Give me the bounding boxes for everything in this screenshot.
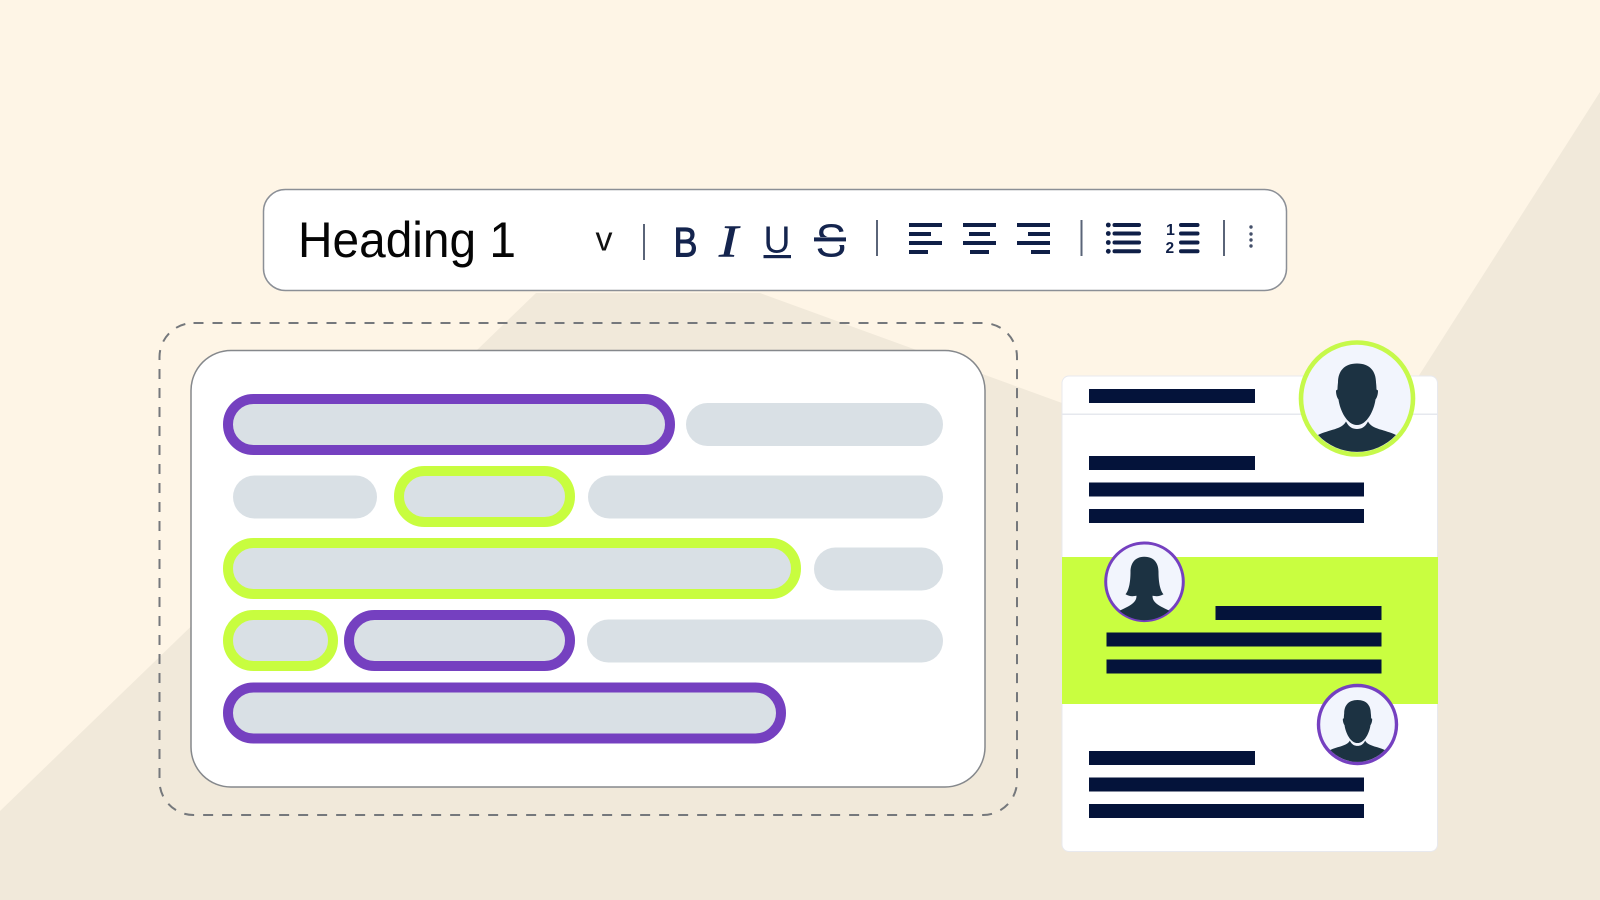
- icon: underline: U: [764, 219, 790, 261]
- header divider: [1062, 414, 1438, 415]
- dashed selection frame: [160, 323, 1017, 815]
- row 1 pills: [228, 399, 943, 450]
- panel: comments card: [1062, 376, 1438, 852]
- icon: strikethrough: S: [816, 214, 846, 266]
- row 3 pills: [228, 543, 943, 594]
- toolbar separators: [643, 220, 1225, 260]
- comment 1 text lines: [1089, 456, 1364, 523]
- icon: italic: I: [718, 216, 741, 266]
- icon: numbered list: 1: [1166, 222, 1175, 239]
- panel: formatting toolbar: [264, 190, 1286, 290]
- icon: more options: [1249, 225, 1253, 248]
- icon: large male avatar: [1301, 342, 1413, 454]
- dropdown caret: v: [596, 220, 612, 258]
- icon: bold: B: [674, 219, 698, 266]
- icon: align right: [1017, 223, 1050, 254]
- icon: numbered list: [1166, 222, 1200, 257]
- highlighted comment band: [1062, 557, 1438, 704]
- comment 2 text lines: [1106, 606, 1382, 674]
- heading style label: Heading 1: [298, 212, 516, 268]
- icon: small male avatar: [1318, 686, 1396, 764]
- icon: female avatar: [1106, 543, 1183, 621]
- panel: text editor card: [191, 350, 985, 787]
- row 4 pills: [228, 615, 943, 666]
- header line: [1089, 389, 1255, 403]
- icon: align center: [963, 223, 996, 254]
- row 5 pill: [228, 688, 781, 738]
- icon: bulleted list: [1106, 223, 1141, 254]
- row 2 pills: [233, 471, 943, 522]
- icon: align left: [909, 223, 942, 254]
- comment 3 text lines: [1089, 751, 1364, 818]
- icon: numbered list: 2: [1166, 240, 1174, 257]
